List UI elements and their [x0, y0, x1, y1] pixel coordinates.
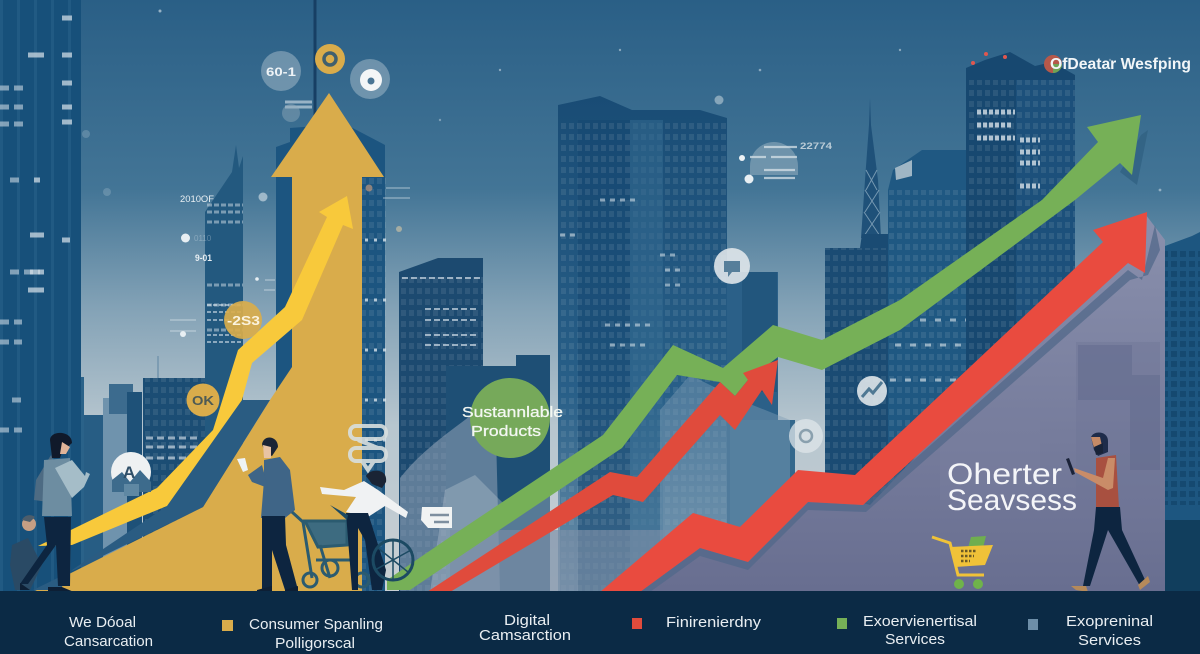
legend item: finirenierdny — [632, 614, 762, 631]
ghost data chart circle: 22774 — [800, 141, 832, 151]
legend item: we dooal cansarcation: Cansarcation — [64, 633, 153, 650]
building: low left block — [84, 356, 205, 592]
chain link icon — [350, 426, 386, 470]
red lower arrow — [600, 212, 1147, 592]
person: cyclist in white shirt — [320, 471, 413, 590]
building: large central tower — [558, 96, 727, 592]
legend item: we dooal cansarcation: We Dóoal — [69, 614, 136, 631]
badge: gold ring icon — [315, 44, 345, 74]
legend item: digital camsarction: Camsarction — [479, 627, 571, 644]
label: other services: Seavsess — [947, 484, 1077, 517]
building: far right — [1165, 232, 1200, 592]
legend item: consumer spanling: Consumer Spanling — [249, 616, 383, 633]
left data annotations: 9-01 — [195, 253, 212, 263]
purple hill behind red arrow — [625, 215, 1165, 592]
person: bearded man walking with phone — [1066, 432, 1150, 592]
label: sustainable products: Products — [471, 423, 541, 440]
legend item: consumer spanling — [222, 616, 383, 652]
label: sustainable products — [462, 404, 563, 440]
person: crouching figure — [10, 515, 42, 590]
label: other services — [947, 458, 1077, 517]
legend item: consumer spanling: Polligorscal — [275, 635, 355, 652]
building: lattice spire — [825, 98, 888, 592]
top-right label with badge: OfDeatar Wesfping — [1050, 56, 1191, 73]
left data annotations: 2010OF — [180, 194, 214, 205]
legend item: exopreninal services: Services — [1078, 632, 1141, 649]
legend item: exoervienertisal services: Exoervienertisal — [863, 613, 977, 630]
icon: chat bubble — [714, 248, 750, 284]
building: mid-right tower — [888, 150, 990, 592]
building: narrow block right of tower — [727, 272, 795, 592]
decorative sky specks — [82, 10, 1161, 196]
label: other services: Oherter — [947, 458, 1062, 491]
legend item: finirenierdny: Finirenierdny — [666, 614, 762, 631]
left data annotations — [170, 102, 410, 337]
red middle arrow — [427, 360, 778, 592]
gold large arrow — [33, 93, 384, 592]
icon: target — [789, 419, 823, 453]
left data annotations: 0110 — [194, 234, 212, 243]
badge: OK — [186, 384, 220, 416]
badge: 60-1 — [261, 51, 301, 91]
building: tall left tower — [0, 0, 84, 592]
dark band under yellow arrow — [33, 400, 270, 590]
bottom legend bar — [0, 591, 1200, 654]
badge: white gear icon — [350, 59, 390, 99]
hazy grey hills — [400, 375, 790, 592]
legend item: exoervienertisal services — [837, 613, 977, 648]
ghost data chart circle — [714, 96, 832, 184]
badge: -2S3: -2S3 — [227, 313, 260, 328]
icon: yellow shopping cart — [932, 536, 993, 589]
badge: -2S3 — [224, 301, 262, 339]
person: woman with phone — [20, 433, 90, 592]
label: sustainable products: Sustannlable — [462, 404, 563, 421]
person: man with tablet and cart — [237, 438, 298, 592]
badge: OK: OK — [192, 393, 215, 408]
green arrow — [387, 115, 1141, 590]
badge: A lightbulb — [111, 452, 151, 496]
building: spire tower — [205, 145, 243, 592]
legend item: exopreninal services: Exopreninal — [1066, 613, 1153, 630]
shopping cart outline — [292, 512, 369, 587]
building: tall dark right tower — [966, 52, 1075, 592]
legend item: exopreninal services — [1028, 613, 1153, 649]
building: tower behind gold arrow — [276, 0, 386, 592]
red lower arrow shadow — [640, 225, 1160, 592]
building: dark block centre left — [399, 258, 550, 592]
legend item: digital camsarction — [479, 612, 571, 644]
yellow arrow — [38, 196, 353, 546]
badge: 60-1: 60-1 — [266, 65, 296, 79]
badge: A lightbulb: A — [123, 463, 135, 482]
green arrow shadow — [1120, 130, 1148, 185]
receipt icon — [421, 507, 452, 528]
legend item: digital camsarction: Digital — [504, 612, 550, 629]
legend item: we dooal cansarcation — [64, 614, 153, 650]
icon: trend line — [857, 376, 887, 406]
legend item: exoervienertisal services: Services — [885, 631, 945, 648]
circle: sustainable products — [462, 378, 563, 458]
